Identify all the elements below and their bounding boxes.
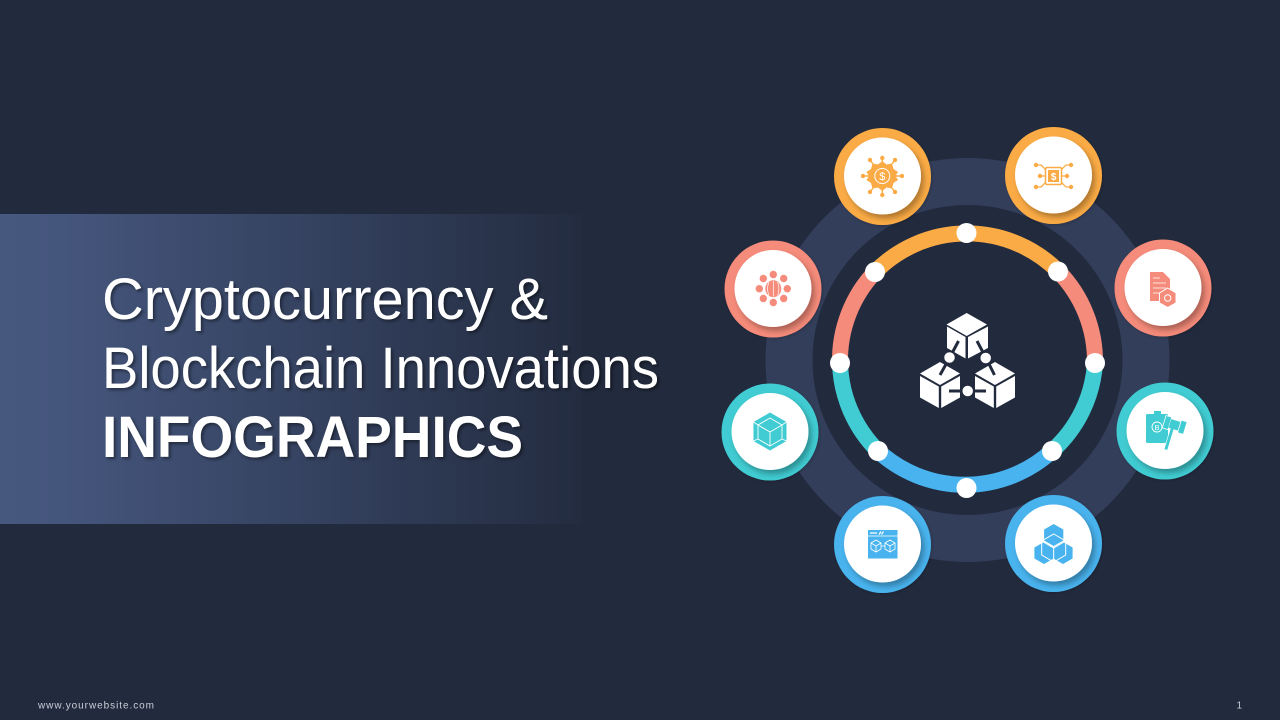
circular diagram bbox=[722, 127, 1214, 593]
teal badge bbox=[1116, 382, 1214, 480]
blue arc bbox=[878, 451, 1052, 485]
node: connected hexagons bbox=[1005, 495, 1102, 592]
title line 1: Cryptocurrency & bbox=[102, 267, 548, 332]
node: smart document bbox=[1114, 240, 1212, 336]
lower right cube bbox=[975, 362, 1015, 408]
title bbox=[102, 267, 659, 470]
blue badge bbox=[1005, 495, 1102, 592]
footer website: www.yourwebsite.com bbox=[37, 700, 155, 712]
lower left cube bbox=[920, 362, 960, 408]
orange badge bbox=[834, 128, 931, 225]
white disc bbox=[844, 138, 921, 214]
white disc bbox=[1015, 136, 1092, 214]
icon: clipboard and gavel: B bbox=[1154, 423, 1160, 432]
title line 3: INFOGRAPHICS bbox=[102, 405, 523, 470]
salmon badge bbox=[1114, 240, 1212, 336]
top cube bbox=[946, 313, 988, 358]
segmented colour ring bbox=[840, 233, 1095, 485]
icon: dollar chip: $ bbox=[1051, 172, 1057, 183]
node: dollar chip bbox=[1005, 127, 1102, 224]
teal arc right bbox=[1052, 363, 1095, 451]
icon: browser window with cubes bbox=[868, 530, 898, 558]
title line 2: Blockchain Innovations bbox=[102, 336, 659, 401]
white disc bbox=[1126, 392, 1204, 469]
node: browser blocks bbox=[834, 496, 931, 593]
teal badge bbox=[722, 384, 818, 480]
title band bbox=[0, 214, 582, 524]
white disc bbox=[844, 506, 921, 582]
teal arc left bbox=[840, 363, 878, 451]
page number: 1 bbox=[1236, 700, 1242, 712]
blue badge bbox=[834, 496, 931, 593]
node: cube sphere bbox=[724, 240, 822, 338]
outer ring bbox=[766, 158, 1170, 562]
node: token network bbox=[834, 128, 931, 225]
icon: cube in hexagon bbox=[754, 412, 786, 450]
orange arc bbox=[875, 233, 1058, 272]
icon: coin with cubes bbox=[756, 271, 791, 306]
ring nodes bbox=[830, 223, 1105, 498]
inner dark disc bbox=[812, 205, 1122, 515]
white disc bbox=[734, 250, 812, 327]
icon: document with hexagon bbox=[1150, 272, 1176, 308]
connector nodes bbox=[944, 352, 992, 397]
icon: three hexagons bbox=[1034, 524, 1073, 564]
salmon arc right bbox=[1058, 271, 1095, 363]
icon: dollar hub: $ bbox=[879, 171, 885, 183]
node: hexagon cube bbox=[722, 384, 818, 480]
white disc bbox=[1124, 249, 1202, 326]
icon: central blockchain cubes bbox=[920, 313, 1015, 408]
node: crypto regulation bbox=[1116, 382, 1214, 480]
white disc bbox=[732, 393, 808, 470]
white disc bbox=[1015, 504, 1092, 582]
salmon badge bbox=[724, 240, 822, 338]
orange badge bbox=[1005, 127, 1102, 224]
connector lines bbox=[940, 341, 994, 391]
salmon arc left bbox=[840, 272, 875, 363]
